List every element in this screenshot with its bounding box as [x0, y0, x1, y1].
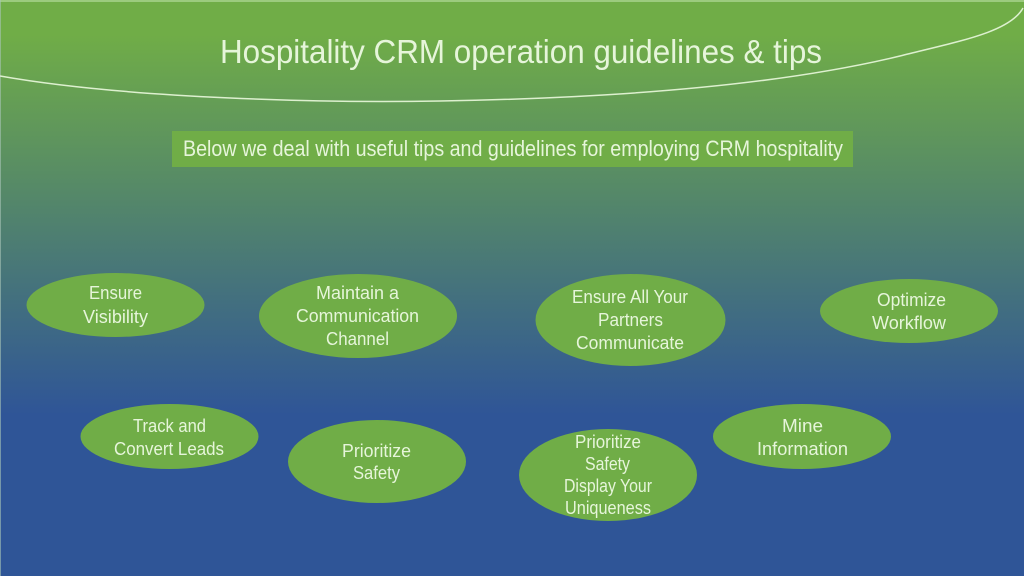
oval: Ensure All Your Partners Communicate — [536, 274, 726, 366]
oval: Maintain a Communication Channel: Channel — [326, 328, 389, 349]
oval: Prioritize Safety Display Your Uniqueness: Display Your — [564, 475, 652, 496]
oval: Prioritize Safety Display Your Uniqueness — [519, 429, 697, 521]
oval: Ensure Visibility — [26, 273, 204, 337]
oval: Prioritize Safety Display Your Uniqueness: Uniqueness — [565, 497, 651, 518]
oval: Prioritize Safety: Safety — [353, 462, 401, 483]
oval: Prioritize Safety Display Your Uniqueness: Safety — [585, 453, 631, 474]
oval: Ensure All Your Partners Communicate: Communicate — [576, 332, 684, 353]
oval: Maintain a Communication Channel: Maintain a — [316, 282, 400, 303]
header curve — [0, 8, 1023, 101]
oval: Track and Convert Leads: Track and — [133, 415, 206, 436]
oval: Prioritize Safety: Prioritize — [342, 440, 411, 461]
oval: Mine Information — [713, 404, 891, 469]
subtitle banner — [172, 131, 853, 167]
oval: Mine Information: Mine — [782, 415, 823, 436]
oval: Prioritize Safety — [288, 420, 466, 503]
oval: Maintain a Communication Channel — [259, 274, 457, 358]
oval: Optimize Workflow: Workflow — [872, 312, 947, 333]
oval: Ensure All Your Partners Communicate: Partners — [598, 309, 663, 330]
title: Hospitality CRM operation guidelines & tips — [220, 33, 822, 70]
oval: Ensure Visibility: Ensure — [89, 282, 142, 303]
oval: Maintain a Communication Channel: Communication — [296, 305, 419, 326]
oval: Optimize Workflow — [820, 279, 998, 343]
oval: Ensure Visibility: Visibility — [83, 306, 149, 327]
oval: Optimize Workflow: Optimize — [877, 289, 946, 310]
oval: Mine Information: Information — [757, 438, 848, 459]
oval: Ensure All Your Partners Communicate: Ensure All Your — [572, 286, 688, 307]
oval: Prioritize Safety Display Your Uniqueness: Prioritize — [575, 431, 641, 452]
oval: Track and Convert Leads: Convert Leads — [114, 438, 224, 459]
oval: Track and Convert Leads — [80, 404, 258, 469]
subtitle banner: Below we deal with useful tips and guidelines for employing CRM hospitality — [183, 136, 843, 161]
